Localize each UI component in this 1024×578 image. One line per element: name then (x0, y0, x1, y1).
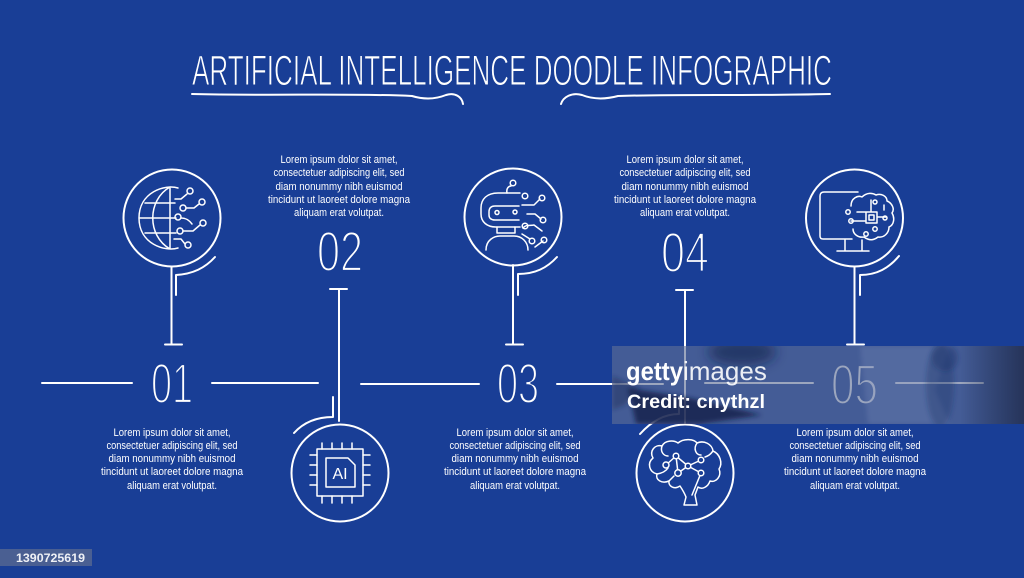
step 02 (268, 154, 410, 522)
text block 04 (614, 154, 756, 219)
watermark credit: Credit: cnythzl (627, 392, 765, 413)
text block 02: tincidunt ut laoreet dolore magna (268, 194, 410, 206)
text block 03 (444, 427, 586, 492)
number 03: 03 (497, 352, 539, 416)
image id tag: 1390725619 (16, 553, 85, 565)
text block 02: aliquam erat volutpat. (294, 207, 384, 219)
text block 05: Lorem ipsum dolor sit amet, (796, 427, 914, 439)
text block 03: Lorem ipsum dolor sit amet, (456, 427, 574, 439)
text block 05: aliquam erat volutpat. (810, 480, 900, 492)
text block 01: tincidunt ut laoreet dolore magna (101, 466, 243, 478)
number 02: 02 (317, 220, 363, 284)
text block 02: consectetuer adipiscing elit, sed (274, 167, 405, 179)
text block 03: diam nonummy nibh euismod (452, 453, 579, 465)
text block 03: aliquam erat volutpat. (470, 480, 560, 492)
text block 02 (268, 154, 410, 219)
text block 05: tincidunt ut laoreet dolore magna (784, 466, 926, 478)
text block 04: Lorem ipsum dolor sit amet, (626, 154, 744, 166)
text block 01: aliquam erat volutpat. (127, 480, 217, 492)
watermark band (612, 346, 1024, 424)
text block 04: aliquam erat volutpat. (640, 207, 730, 219)
text block 01: diam nonummy nibh euismod (108, 453, 236, 465)
icon: monitor with brain chip (806, 170, 903, 344)
text block 02: diam nonummy nibh euismod (276, 181, 403, 193)
text block 01: Lorem ipsum dolor sit amet, (114, 427, 230, 439)
icon: globe with circuit (124, 170, 220, 344)
icon: brain network (636, 290, 734, 522)
number 01: 01 (151, 352, 193, 416)
number 04: 04 (661, 221, 709, 285)
icon: AI chip (292, 289, 388, 522)
number 05: 05 (831, 353, 878, 417)
text block 02: Lorem ipsum dolor sit amet, (280, 154, 398, 166)
icon: AI chip: AI (332, 466, 348, 483)
text block 05: consectetuer adipiscing elit, sed (790, 440, 921, 452)
text block 04: diam nonummy nibh euismod (622, 181, 749, 193)
text block 03: consectetuer adipiscing elit, sed (450, 440, 581, 452)
step 04 (614, 154, 756, 522)
text block 04: consectetuer adipiscing elit, sed (620, 167, 751, 179)
step 03 (444, 168, 586, 492)
text block 01 (101, 427, 243, 492)
text block 04: tincidunt ut laoreet dolore magna (614, 194, 756, 206)
text block 05: diam nonummy nibh euismod (792, 453, 919, 465)
watermark logo: gettyimages (626, 356, 767, 386)
timeline line segments (42, 383, 983, 384)
step 05 (784, 170, 926, 492)
icon: robot with circuit (464, 168, 562, 344)
title (192, 47, 832, 104)
text block 01: consectetuer adipiscing elit, sed (106, 440, 238, 452)
text block 05 (784, 427, 926, 492)
text block 03: tincidunt ut laoreet dolore magna (444, 466, 586, 478)
step 01 (101, 170, 243, 492)
image id tag (0, 549, 92, 566)
